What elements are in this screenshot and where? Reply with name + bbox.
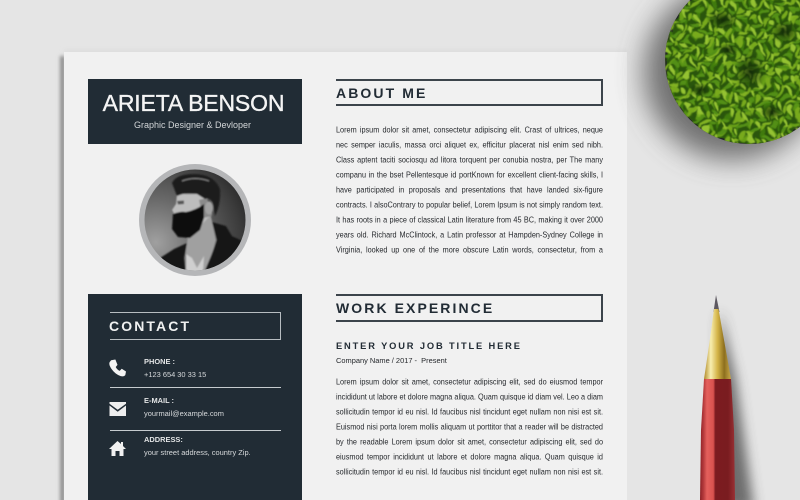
icon: envelope bbox=[110, 402, 126, 416]
phone value: +123 654 30 33 15 bbox=[144, 370, 206, 379]
work text: Euismod nisi porta lorem mollis aliquam ut porttitor that a reader will be distracted bbox=[336, 421, 603, 432]
contact panel bbox=[88, 294, 302, 500]
work text: Lorem ipsum dolor sit amet, consectetur adipiscing elit, sed do eiusmod tempor bbox=[336, 376, 603, 387]
face bbox=[172, 194, 212, 226]
about heading box bbox=[336, 79, 603, 106]
icon: home bbox=[109, 441, 126, 456]
about text: It has roots in a piece of classical Latin literature from 45 BC, making it over 2000 bbox=[336, 214, 603, 225]
plant in pot bbox=[665, 0, 800, 144]
about text: nec semper iaculis, massa orci aliquet ex, efficitur placerat nisl enim sed nibh. bbox=[336, 139, 603, 150]
nib bbox=[714, 295, 720, 312]
work text: incididunt ut labore et dolore magna aliqua. Quam quisque id diam vel. Leo a diam bbox=[336, 391, 603, 402]
about text: companu in the bset Pellentesque id portKnown for excellent client-facing skills, I bbox=[336, 169, 603, 180]
about text: contracts. I alsoContrary to popular belief, Lorem Ipsum is not simply random text. bbox=[336, 199, 603, 210]
address value: your street address, country Zip. bbox=[144, 448, 251, 457]
plant shadow bbox=[624, 0, 800, 178]
job title: ENTER YOUR JOB TITLE HERE bbox=[336, 341, 522, 351]
beard bbox=[172, 204, 204, 238]
contact heading: CONTACT bbox=[109, 318, 191, 334]
work heading box bbox=[336, 294, 603, 322]
red barrel bbox=[700, 379, 735, 500]
work text: by the readable Lorem ipsum dolor sit amet, consectetur adipiscing elit, sed do bbox=[336, 436, 603, 447]
email label: E-MAIL : bbox=[144, 396, 174, 405]
neck and chest bbox=[186, 212, 216, 272]
ear bbox=[205, 202, 213, 214]
hair bbox=[172, 174, 220, 216]
work text: sollicitudin tempor id eu nisl. Id faucibus nisl tincidunt eget nullam non nisi est sit. bbox=[336, 466, 603, 477]
about text: Class aptent taciti sociosqu ad litora torquent per conubia nostra, per The many bbox=[336, 154, 603, 165]
company and dates: Company Name / 2017 - Present bbox=[336, 356, 447, 365]
icon: phone bbox=[109, 360, 126, 376]
name: ARIETA BENSON bbox=[103, 90, 284, 116]
email value: yourmail@example.com bbox=[144, 409, 224, 418]
pen bbox=[700, 295, 735, 500]
work text: sollicitudin tempor id eu nisl. Id faucibus nisl tincidunt eget nullam non nisi est sit. bbox=[336, 406, 603, 417]
work heading: WORK EXPERINCE bbox=[336, 300, 494, 316]
pen shadow bbox=[720, 314, 761, 500]
name banner bbox=[88, 79, 302, 144]
about text: Lorem ipsum dolor sit amet, consectetur adipiscing elit. Crast of ultrices, neque bbox=[336, 124, 603, 135]
work text: eiusmod tempor incididunt ut labore et dolore magna aliqua. Quam quisque id bbox=[336, 451, 603, 462]
gold cone bbox=[704, 309, 731, 379]
phone label: PHONE : bbox=[144, 357, 175, 366]
about heading: ABOUT ME bbox=[336, 85, 427, 101]
about text: Virginia, looked up one of the more obscure Latin words, consectetur, from a bbox=[336, 244, 603, 255]
about text: have participated in proposals and presentations that have landed six-figure bbox=[336, 184, 603, 195]
paper sheet bbox=[64, 52, 627, 500]
about text bbox=[336, 124, 603, 255]
address label: ADDRESS: bbox=[144, 435, 183, 444]
portrait photo bbox=[139, 164, 251, 276]
about text: years old. Richard McClintock, a Latin professor at Hampden-Sydney College in bbox=[336, 229, 603, 240]
work text bbox=[336, 376, 603, 477]
job title: Graphic Designer & Devloper bbox=[134, 120, 251, 130]
jacket bbox=[160, 242, 188, 270]
contact heading box bbox=[110, 312, 281, 340]
